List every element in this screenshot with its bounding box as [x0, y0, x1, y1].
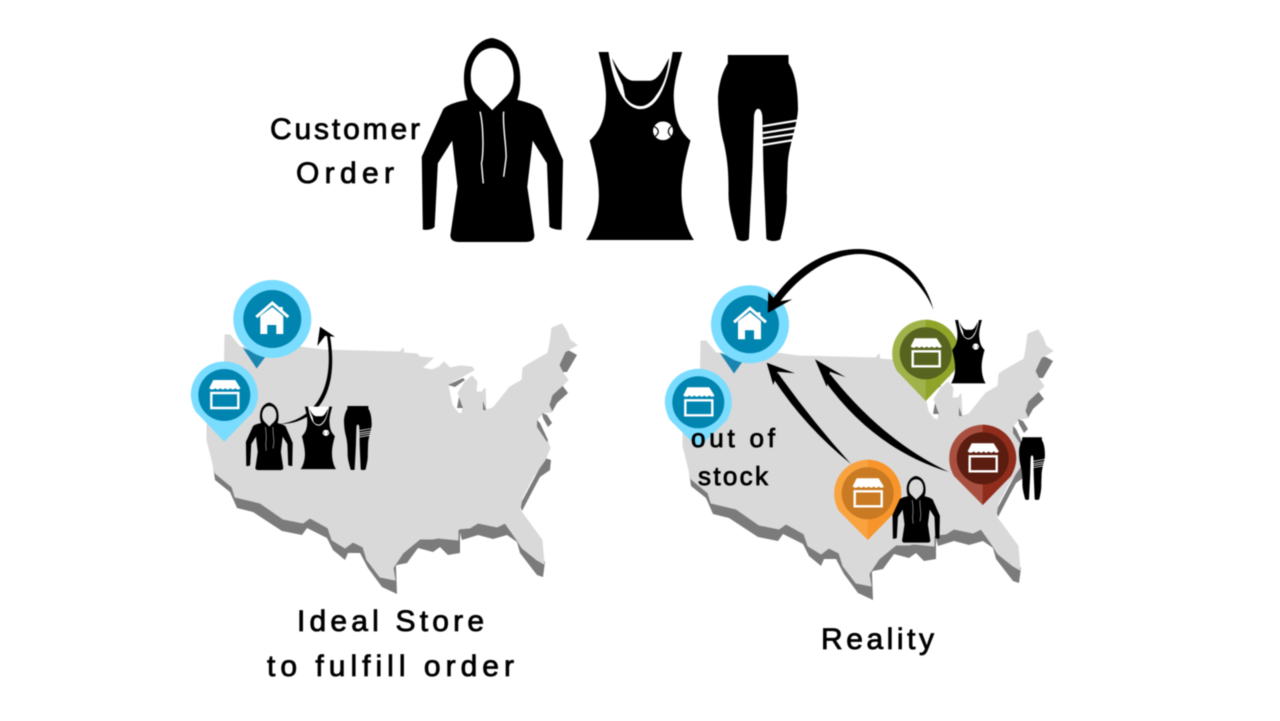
caption: Ideal Store to fulfill order: Ideal Store	[297, 605, 484, 638]
panel: reality map	[665, 249, 1053, 600]
caption: Ideal Store to fulfill order: to fulfill order	[267, 650, 514, 683]
pin: store orange	[834, 460, 901, 540]
panel: ideal store map	[191, 280, 577, 594]
US map, left	[207, 324, 577, 594]
arrow: to home, left	[280, 327, 335, 424]
label: out of stock	[691, 423, 776, 491]
heading: Customer Order: Customer	[270, 113, 420, 146]
small tank top, left	[301, 407, 336, 469]
icon: hoodie	[422, 38, 563, 242]
caption: Reality: Reality	[821, 623, 934, 656]
pin: home, left	[233, 280, 311, 368]
small leggings, right	[1019, 437, 1045, 500]
pin: store out of stock, right	[665, 369, 732, 448]
US map, right	[683, 330, 1053, 600]
pin: store, left	[191, 361, 258, 442]
pin: store red	[949, 425, 1016, 505]
icon: leggings	[718, 55, 798, 241]
arrow: orange store to home	[767, 363, 851, 464]
heading: Customer Order	[270, 113, 420, 190]
label: out of stock: stock	[698, 461, 769, 491]
icon: tank top	[586, 52, 694, 240]
small hoodie, left	[246, 403, 293, 470]
label: out of stock: out of	[691, 423, 776, 453]
pin: home, right	[711, 285, 789, 374]
small leggings, left	[344, 406, 372, 470]
arrow: red store to home	[815, 359, 949, 472]
caption: Ideal Store to fulfill order	[267, 605, 514, 683]
pin: store green	[892, 320, 959, 401]
large garments: customer order	[422, 38, 798, 242]
small hoodie, right	[892, 476, 940, 543]
arrow: green store to home	[768, 249, 934, 313]
small tank top, right	[951, 320, 986, 383]
heading: Customer Order: Order	[296, 157, 394, 190]
